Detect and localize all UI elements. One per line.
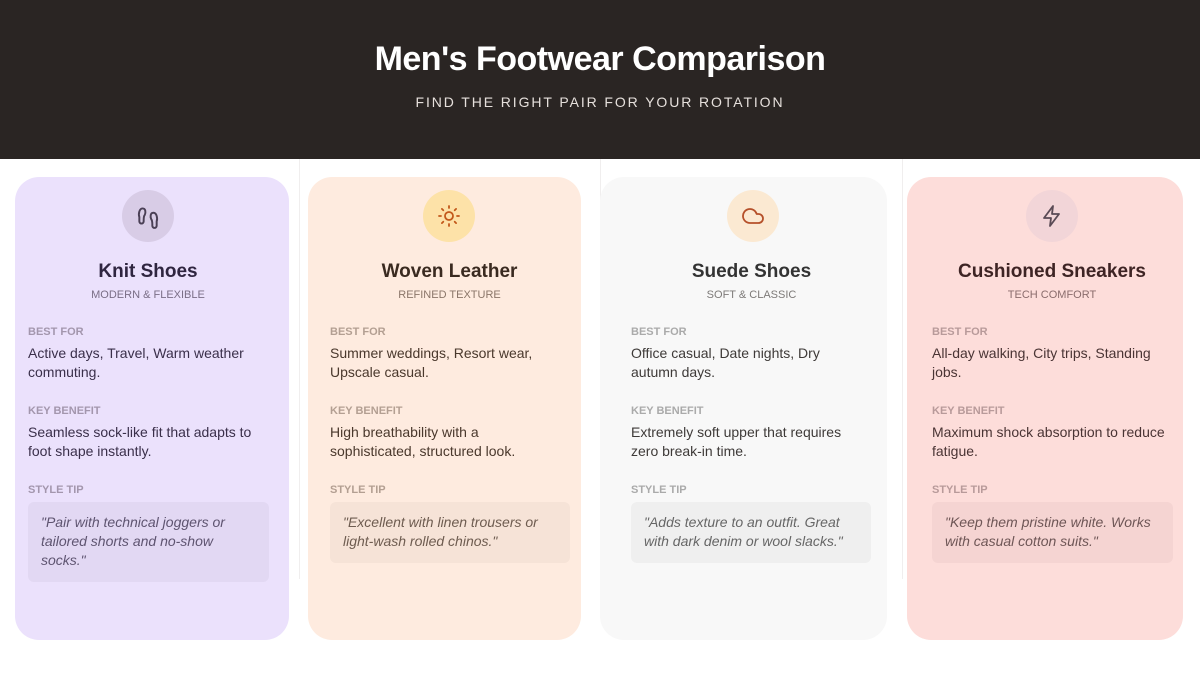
- best for: [631, 326, 820, 380]
- style tip label: STYLE TIP: [28, 484, 84, 496]
- icon: lightning: [1026, 190, 1078, 242]
- icon: footprints: [122, 190, 174, 242]
- best for: BEST FOR: [631, 326, 687, 338]
- key benefit: High breathability with a sophisticated, structured look.: [330, 424, 515, 459]
- best for: BEST FOR: [28, 326, 84, 338]
- best for: BEST FOR: [330, 326, 386, 338]
- best for: [28, 326, 244, 380]
- header band: [0, 0, 1200, 159]
- tip box: "Keep them pristine white. Works with casual cotton suits.": [945, 514, 1151, 549]
- card title: Cushioned Sneakers: [958, 261, 1146, 282]
- key benefit: [330, 405, 515, 459]
- tip box: "Excellent with linen trousers or light-wash rolled chinos.": [343, 514, 538, 549]
- tip box: "Adds texture to an outfit. Great with dark denim or wool slacks.": [644, 514, 843, 549]
- best for: Summer weddings, Resort wear, Upscale casual.: [330, 345, 532, 380]
- tip box: "Pair with technical joggers or tailored shorts and no-show socks.": [41, 514, 225, 568]
- icon: cloud: [726, 190, 778, 242]
- tip box: [330, 502, 570, 563]
- card subtitle: MODERN & FLEXIBLE: [91, 289, 205, 301]
- best for: BEST FOR: [932, 326, 988, 338]
- key benefit: KEY BENEFIT: [932, 405, 1005, 417]
- style tip label: STYLE TIP: [631, 484, 687, 496]
- key benefit: Maximum shock absorption to reduce fatigue.: [932, 424, 1165, 459]
- best for: All-day walking, City trips, Standing jobs.: [932, 345, 1151, 380]
- key benefit: [28, 405, 251, 459]
- panel: suede shoes: [600, 177, 887, 640]
- title: Men's Footwear Comparison: [375, 40, 825, 78]
- tip box: [28, 502, 269, 582]
- best for: [932, 326, 1151, 380]
- key benefit: KEY BENEFIT: [28, 405, 101, 417]
- card title: Suede Shoes: [692, 261, 811, 282]
- best for: [330, 326, 532, 380]
- best for: Office casual, Date nights, Dry autumn days.: [631, 345, 820, 380]
- card title: Knit Shoes: [98, 261, 198, 282]
- key benefit: [631, 405, 841, 459]
- card subtitle: REFINED TEXTURE: [398, 289, 501, 301]
- panel: knit shoes: [15, 177, 289, 640]
- icon: sun: [422, 190, 474, 242]
- best for: Active days, Travel, Warm weather commuting.: [28, 345, 244, 380]
- panel: cushioned sneakers: [907, 177, 1183, 640]
- style tip label: STYLE TIP: [932, 484, 988, 496]
- style tip label: STYLE TIP: [330, 484, 386, 496]
- tip box: [932, 502, 1173, 563]
- panel: woven leather: [308, 177, 581, 640]
- card subtitle: TECH COMFORT: [1008, 289, 1096, 301]
- key benefit: KEY BENEFIT: [330, 405, 403, 417]
- key benefit: [932, 405, 1165, 459]
- card subtitle: SOFT & CLASSIC: [707, 289, 796, 301]
- key benefit: Seamless sock-like fit that adapts to foot shape instantly.: [28, 424, 251, 459]
- tip box: [631, 502, 871, 563]
- key benefit: Extremely soft upper that requires zero break-in time.: [631, 424, 841, 459]
- card title: Woven Leather: [382, 261, 517, 282]
- subtitle: FIND THE RIGHT PAIR FOR YOUR ROTATION: [416, 94, 784, 110]
- key benefit: KEY BENEFIT: [631, 405, 704, 417]
